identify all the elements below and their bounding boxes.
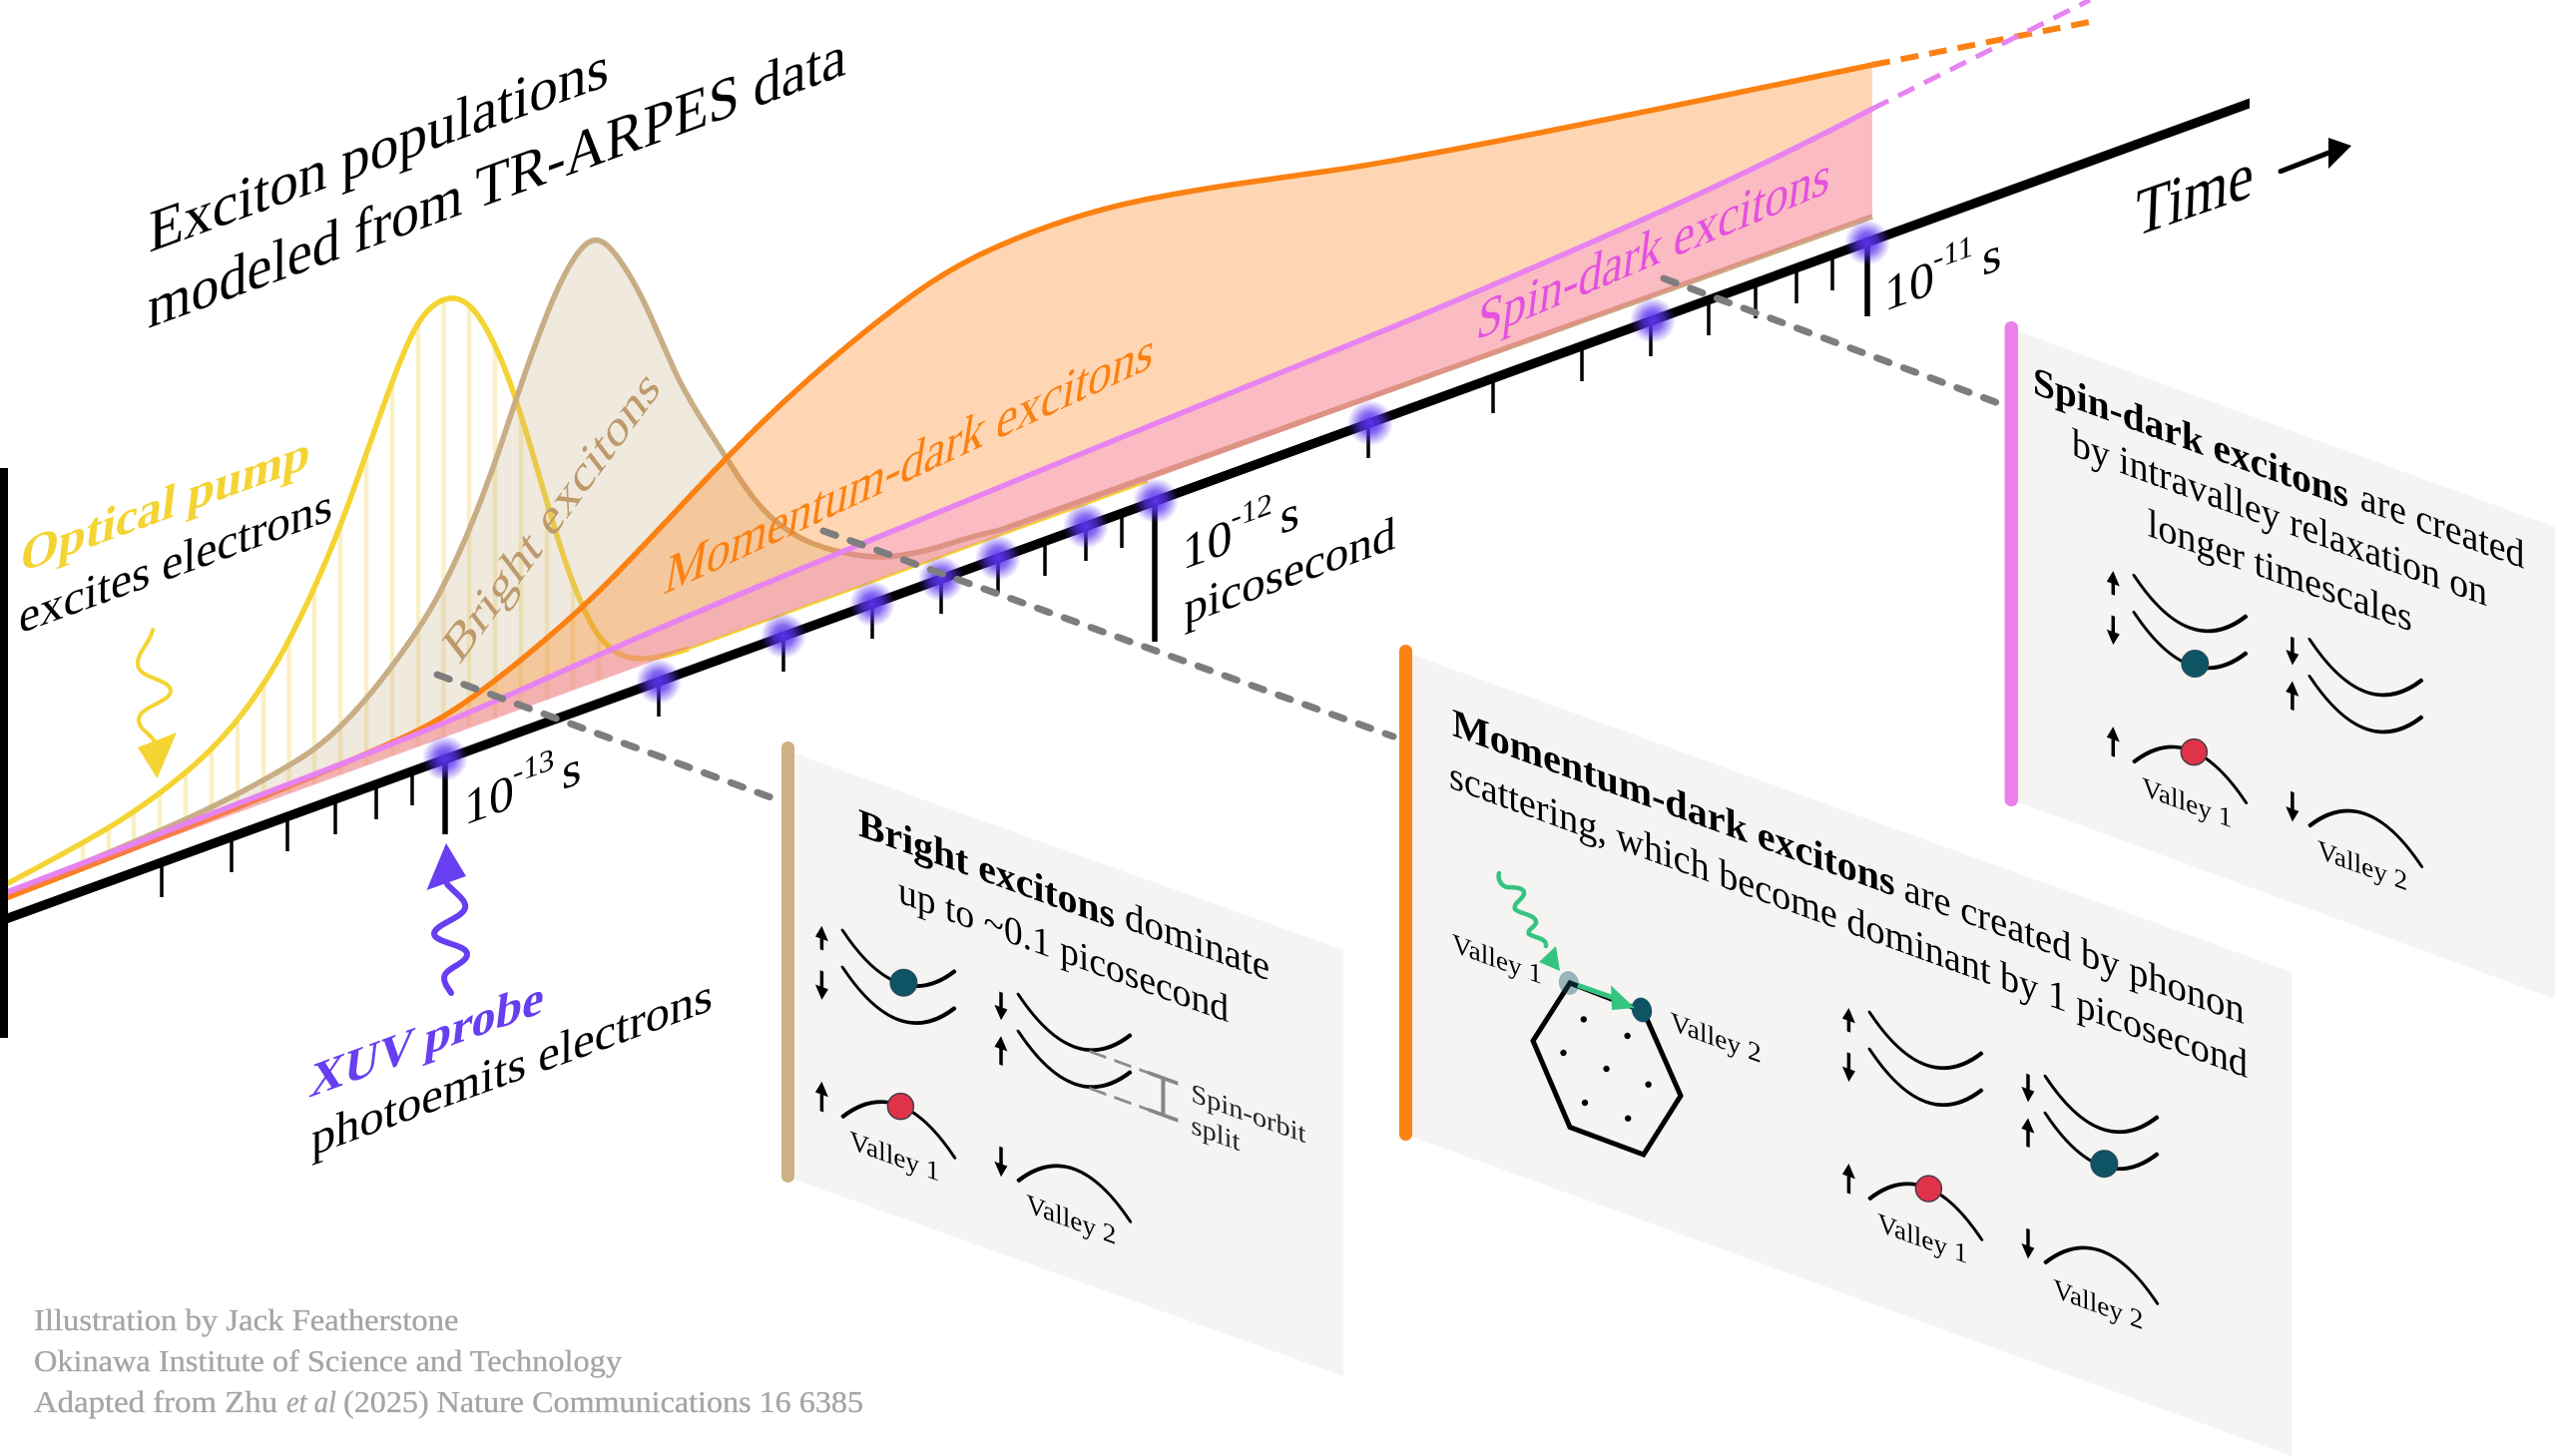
- spin-dark excitons curve: [7, 109, 1872, 892]
- axis label: 10^-12 s picosecond: 10: [1182, 508, 1232, 582]
- leader: spin-dark excitons: [1664, 278, 2001, 404]
- diagram: hexagonal Brillouin zone with phonon scattering: [1452, 873, 1762, 1155]
- axis label: 10^-13 s: [464, 730, 581, 837]
- bright excitons curve: [6, 217, 1872, 894]
- axis label: 10^-12 s picosecond: [1182, 440, 1395, 637]
- diagram: momentum-dark excitons band structure: Valley 1: [1877, 1208, 1967, 1270]
- label: momentum-dark excitons curve: Momentum-dark excitons: [661, 316, 1160, 608]
- diagram: bright excitons band structure: split: [1191, 1110, 1241, 1158]
- axis label: 10^-12 s picosecond: -12: [1232, 485, 1273, 535]
- bright excitons fill: [6, 217, 1872, 896]
- icon: XUV probe wavy arrow: [427, 843, 467, 993]
- text: bright excitons panel: up to ~0.1 picosecond: [898, 867, 1229, 1031]
- credits: et al: [286, 1384, 336, 1419]
- title: Exciton populations: [149, 33, 609, 266]
- spin-dark excitons fill: [7, 109, 1872, 897]
- text: bright excitons panel: [858, 799, 1270, 1031]
- momentum-dark excitons fill: [6, 65, 1872, 898]
- left vertical bar: [0, 468, 8, 1038]
- text: bright excitons panel: Bright excitons: [858, 799, 1115, 937]
- leader: bright excitons: [437, 675, 773, 798]
- major ticks: [445, 243, 1867, 834]
- optical pump curve: [6, 298, 689, 884]
- label: optical pump: Optical pump: [18, 424, 313, 585]
- axis label: 10^-11 s: s: [1982, 226, 2001, 287]
- momentum-dark dashed extrapolation: [1872, 22, 2090, 65]
- text: spin-dark excitons panel: [2033, 357, 2525, 641]
- text: momentum-dark excitons panel: are created by phonon: [1904, 864, 2245, 1033]
- label: optical pump: excites electrons: [19, 477, 332, 645]
- axis label: 10^-12 s picosecond: s: [1280, 484, 1299, 546]
- axis label: Time: Time: [2134, 136, 2256, 251]
- text: momentum-dark excitons panel: Momentum-dark excitons: [1452, 700, 1895, 905]
- label: spin-dark excitons curve: Spin-dark excitons: [1473, 142, 1834, 353]
- arrow: time direction: [2281, 138, 2351, 172]
- panel: spin-dark excitons background: [2004, 321, 2555, 999]
- axis label: 10^-12 s picosecond: picosecond: [1184, 507, 1395, 636]
- diagram: bright excitons band structure: Spin-orbit: [1191, 1078, 1306, 1150]
- time axis with ticks: [0, 98, 2250, 1038]
- text: bright excitons panel: dominate: [1125, 892, 1270, 989]
- diagram: bright excitons band structure: Valley 2: [1026, 1189, 1116, 1251]
- axis label: 10^-11 s: [1884, 217, 2001, 323]
- diagram: bright excitons band structure: Valley 1: [849, 1126, 939, 1189]
- leader: momentum-dark excitons: [823, 531, 1393, 736]
- diagram: bright excitons band structure: [815, 920, 1306, 1321]
- diagram: spin-dark excitons band structure: Valley 2: [2317, 835, 2407, 897]
- text: spin-dark excitons panel: longer timescales: [2148, 500, 2412, 641]
- axis line: [0, 98, 2250, 926]
- spin-dark dashed extrapolation: [1872, 0, 2090, 109]
- credits: Illustration by Jack Featherstone: [34, 1302, 459, 1337]
- diagram: momentum-dark excitons band structure: Valley 2: [2053, 1273, 2143, 1336]
- diagram: spin-dark excitons band structure: Valley 1: [2142, 771, 2232, 834]
- probe glow markers: [422, 220, 1890, 781]
- title: modeled from TR-ARPES data: [148, 22, 846, 342]
- text: momentum-dark excitons panel: scattering, which become dominant by 1 picosecond: [1449, 751, 2248, 1087]
- panel: bright excitons background: [781, 741, 1343, 1376]
- credits: (2025) Nature Communications 16 6385: [343, 1384, 863, 1419]
- label: XUV probe: photoemits electrons: [311, 967, 713, 1167]
- credits: Okinawa Institute of Science and Technology: [34, 1343, 623, 1378]
- diagram: hexagonal Brillouin zone with phonon scattering: Valley 1: [1452, 928, 1542, 991]
- minor ticks: [162, 254, 1832, 897]
- panel: momentum-dark excitons background: [1399, 645, 2292, 1456]
- axis label: 10^-11 s: -11: [1933, 227, 1973, 276]
- label: XUV probe: XUV probe: [307, 969, 547, 1110]
- diagram: hexagonal Brillouin zone with phonon scattering: Valley 2: [1671, 1007, 1762, 1070]
- optical pump tail along baseline: [684, 481, 1148, 651]
- chart: exciton population curves: [6, 0, 2090, 898]
- credits: Adapted from Zhu: [34, 1384, 277, 1419]
- axis label: 10^-13 s: -13: [513, 740, 554, 790]
- axis label: 10^-13 s: 10: [464, 763, 514, 837]
- axis label: 10^-13 s: s: [562, 739, 581, 801]
- diagram: momentum-dark excitons band structure: [1842, 1003, 2157, 1341]
- text: spin-dark excitons panel: are created: [2360, 473, 2525, 578]
- text: spin-dark excitons panel: Spin-dark excitons: [2033, 357, 2348, 517]
- credits: [34, 1302, 863, 1419]
- diagram: spin-dark excitons band structure: [2107, 566, 2421, 903]
- icon: optical pump wavy arrow: [138, 630, 177, 778]
- optical pump pulse hatching: [83, 301, 599, 868]
- text: spin-dark excitons panel: by intravalley relaxation on: [2072, 419, 2487, 615]
- momentum-dark excitons curve: [6, 65, 1872, 898]
- axis label: 10^-11 s: 10: [1884, 249, 1934, 323]
- label: bright excitons curve: Bright excitons: [434, 357, 669, 675]
